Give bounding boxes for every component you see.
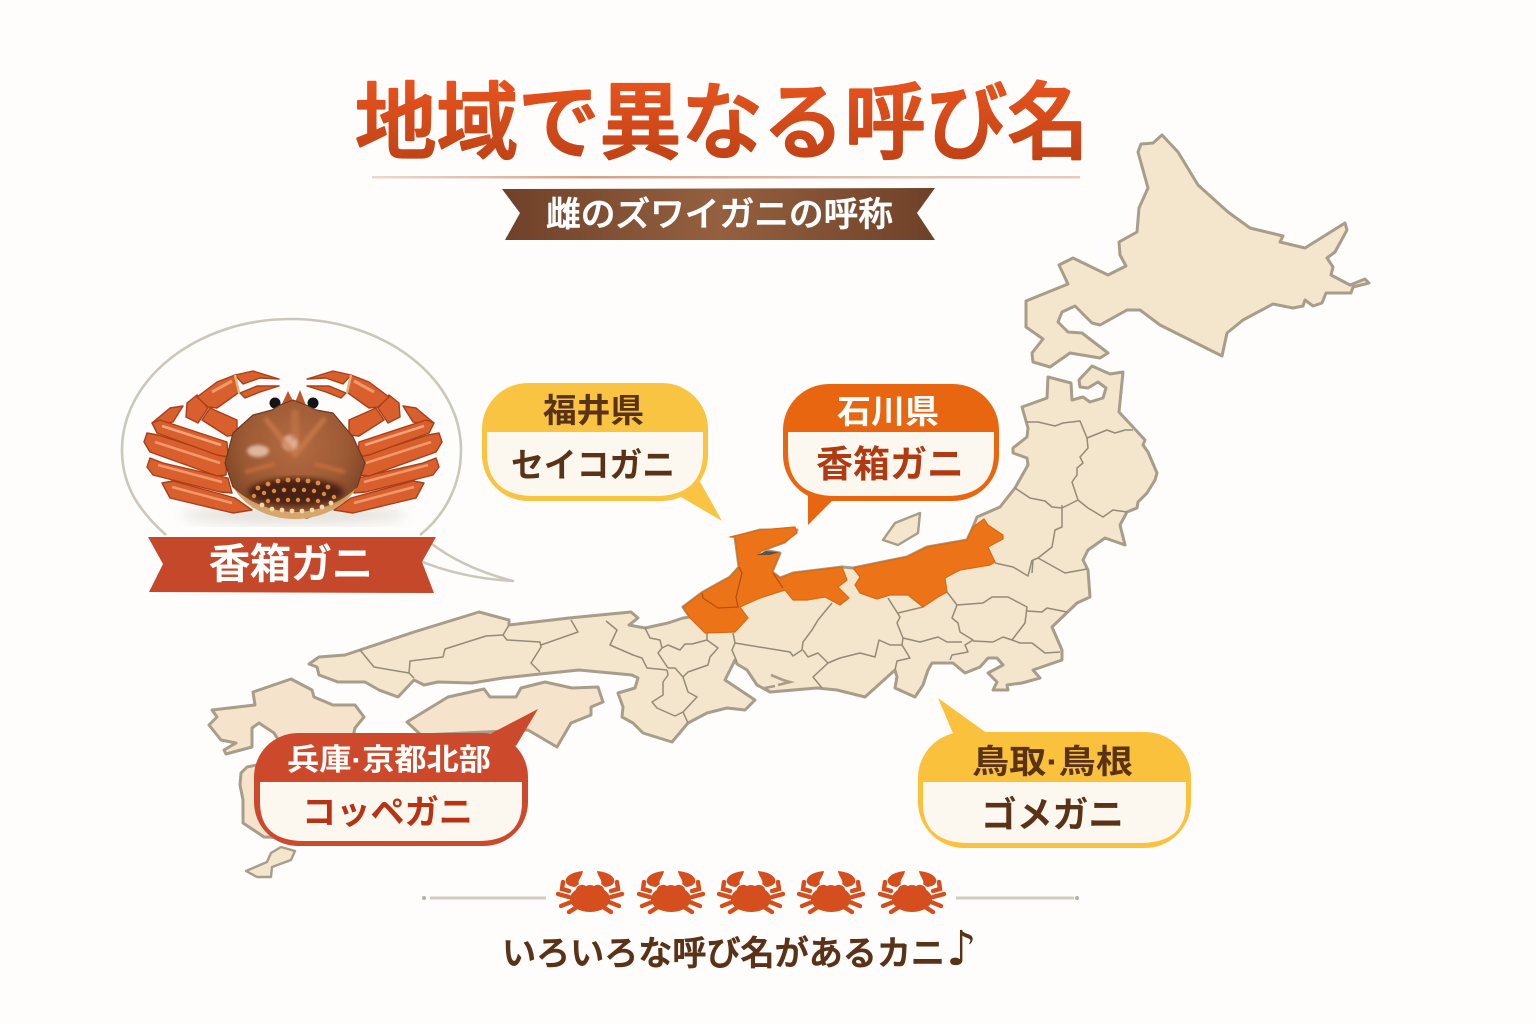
- callout: Ishikawa: 石川県: [837, 393, 939, 430]
- callout: Tottori and Shimane: ゴメガニ: [981, 794, 1124, 835]
- bubble outline: [122, 319, 461, 535]
- subtitle ribbon: [502, 188, 935, 240]
- map: highlighted prefecture borders: [702, 567, 783, 608]
- icon: crab: [799, 871, 863, 912]
- map: Sado island: [883, 513, 920, 545]
- crab speech bubble: [122, 319, 513, 593]
- callout: Fukui: [482, 383, 722, 521]
- subtitle ribbon: 雌のズワイガニの呼称: [546, 196, 893, 234]
- divider with crab icons: [422, 871, 1079, 912]
- map: highlighted Fukui-Tottori coast: [683, 527, 849, 633]
- title: 地域で異なる呼び名: [355, 76, 1089, 170]
- crab name banner: [148, 537, 436, 593]
- map: highlighted Ishikawa-Niigata coast: [853, 519, 1003, 607]
- map: Honshu: [309, 366, 1157, 742]
- crab shell: [225, 400, 365, 518]
- icon: crab: [719, 871, 783, 912]
- callout: Ishikawa: 香箱ガニ: [816, 444, 964, 485]
- callout: Fukui: セイコガニ: [511, 447, 675, 485]
- map: Tanegashima: [246, 847, 295, 877]
- closing message: いろいろな呼び名があるカニ: [502, 935, 945, 973]
- crab illustration: [144, 371, 442, 525]
- map: Noto bay: [757, 551, 779, 555]
- icon: crab: [639, 871, 703, 912]
- crab name banner: 香箱ガニ: [209, 541, 373, 587]
- callout: Hyogo and Kyoto: [254, 709, 538, 846]
- callout: Hyogo and Kyoto: コッペガニ: [302, 794, 473, 832]
- callout: Fukui: 福井県: [543, 392, 644, 429]
- callout: Tottori and Shimane: 鳥取·鳥根: [972, 743, 1133, 780]
- icon: crab: [880, 871, 944, 912]
- closing message: [502, 921, 977, 977]
- map: Hokkaido: [1026, 135, 1369, 367]
- map: bay marks: [765, 675, 790, 692]
- map: southern Kyushu: [240, 765, 300, 838]
- map: prefecture borders: [360, 421, 1133, 723]
- bubble tail: [418, 541, 513, 581]
- callout: Tottori and Shimane: [918, 698, 1191, 848]
- map: northern Kyushu: [209, 679, 364, 754]
- map: Shikoku: [407, 682, 603, 747]
- crab spikes and eyes: [280, 391, 295, 408]
- callout: Ishikawa: [783, 384, 999, 525]
- callout: Hyogo and Kyoto: 兵庫·京都北部: [287, 744, 491, 777]
- icon: crab: [558, 871, 622, 912]
- map of Japan: [209, 135, 1369, 877]
- closing message: ♪: [946, 921, 977, 977]
